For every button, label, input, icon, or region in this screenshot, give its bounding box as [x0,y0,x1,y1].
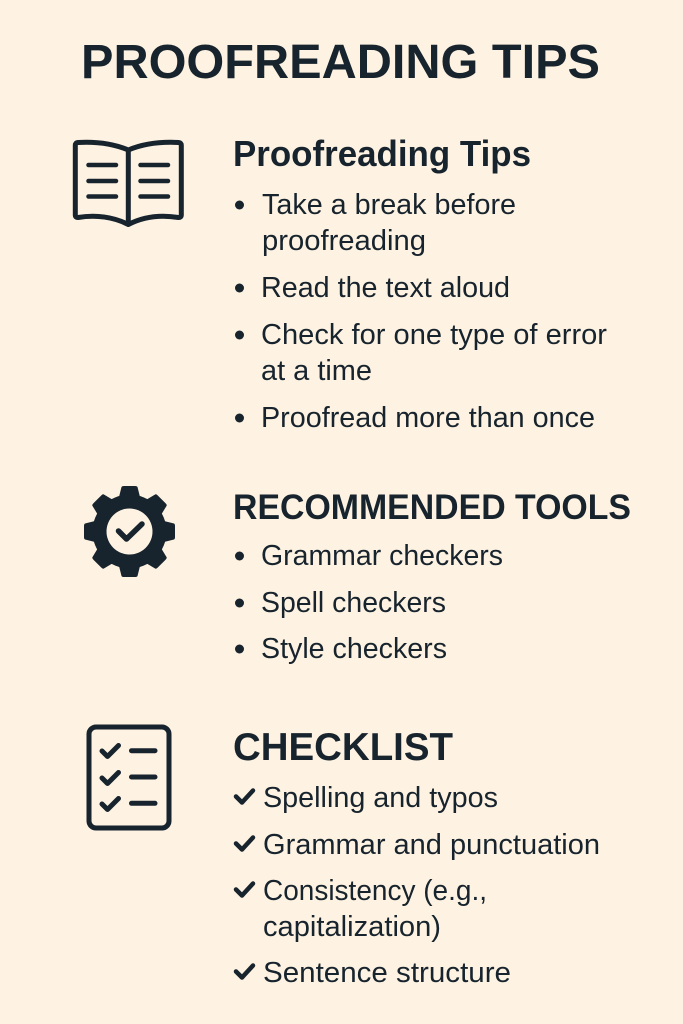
check list items: Consistency (e.g., [263,875,487,907]
icon: open book [75,142,181,224]
bullet list: tips: at a time [261,355,372,387]
panel: recommended tools [233,488,631,665]
bullet list: tips: Proofread more than once [261,402,595,434]
heading: recommended tools: RECOMMENDED TOOLS [233,488,631,527]
bullet list: tools: Spell checkers [261,587,446,619]
check list items [236,782,600,989]
bullet list: tools: Grammar checkers [261,540,503,572]
heading: proofreading tips: Proofreading Tips [233,133,531,174]
title: PROOFREADING TIPS [81,36,600,89]
bullet list: tools: Style checkers [261,633,447,665]
bullet list: tips [235,189,607,434]
bullet list: tips: proofreading [262,225,426,257]
bullet list: tips: Take a break before [262,189,516,221]
panel: checklist [233,726,600,989]
check list items: Sentence structure [263,957,511,989]
bullet list: tips: Read the text aloud [261,272,510,304]
bullet list: tips: Check for one type of error [261,319,607,351]
check list items: capitalization) [263,911,441,943]
panel: proofreading tips [233,133,607,434]
heading: checklist: CHECKLIST [233,726,453,769]
icon: checklist [89,727,169,828]
bullet list: tools [235,540,503,665]
check list items: Spelling and typos [263,782,498,814]
check list items: Grammar and punctuation [263,829,600,861]
icon: gear with check [84,486,175,577]
